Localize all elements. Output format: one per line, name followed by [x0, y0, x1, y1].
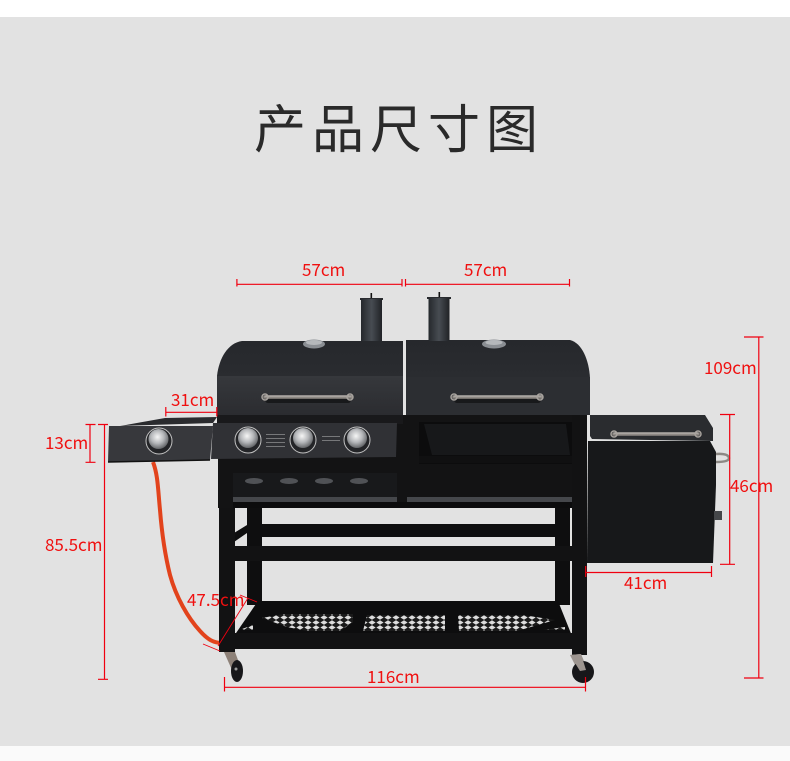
rear legs and cross bars — [234, 505, 570, 605]
control panel — [211, 415, 403, 459]
dimension: 46cm — [720, 414, 773, 564]
dimension: 85.5cm — [45, 424, 108, 679]
smoker handle — [611, 431, 701, 437]
panel print — [266, 434, 340, 447]
casters — [224, 652, 594, 683]
dimension: 31cm: 31cm — [171, 386, 214, 411]
dimension: 57cm right: 57cm — [464, 256, 507, 281]
cabinet body — [218, 415, 572, 508]
left lid — [217, 341, 403, 415]
dimension: 13cm: 13cm — [45, 429, 88, 454]
dimension: 13cm — [45, 424, 96, 462]
dimension: 31cm — [166, 386, 217, 416]
firebox door — [406, 415, 572, 497]
vents — [245, 478, 368, 484]
left chimney — [360, 293, 383, 341]
thermometers — [303, 340, 506, 348]
dimension: 41cm — [586, 566, 712, 594]
lid handles — [262, 394, 543, 400]
front frame — [219, 415, 587, 655]
dimension: 47.5cm: 47.5cm — [187, 586, 244, 611]
mesh shelf — [234, 601, 572, 636]
dimension: 116cm: 116cm — [367, 663, 420, 688]
dimension: 57cm left: 57cm — [302, 256, 345, 281]
dimension: 57cm left — [237, 256, 402, 286]
dimension: 57cm right — [406, 256, 570, 286]
knobs — [146, 427, 370, 454]
title: 产品尺寸图 — [254, 88, 544, 163]
side smoker box — [587, 415, 729, 563]
drip trays — [233, 497, 572, 502]
grill illustration — [108, 292, 729, 683]
gas hose — [153, 462, 222, 643]
dimension: 109cm — [704, 337, 764, 678]
bottom strip — [0, 746, 790, 761]
dimension: 47.5cm — [187, 586, 257, 651]
dimension: 41cm: 41cm — [624, 569, 667, 594]
right chimney — [427, 292, 451, 341]
dimension: 46cm: 46cm — [730, 472, 773, 497]
dimension: 85.5cm: 85.5cm — [45, 531, 102, 556]
dimension: 109cm: 109cm — [704, 354, 757, 379]
side shelf — [108, 417, 217, 462]
right lid — [406, 340, 590, 415]
dimension: 116cm — [224, 663, 586, 692]
